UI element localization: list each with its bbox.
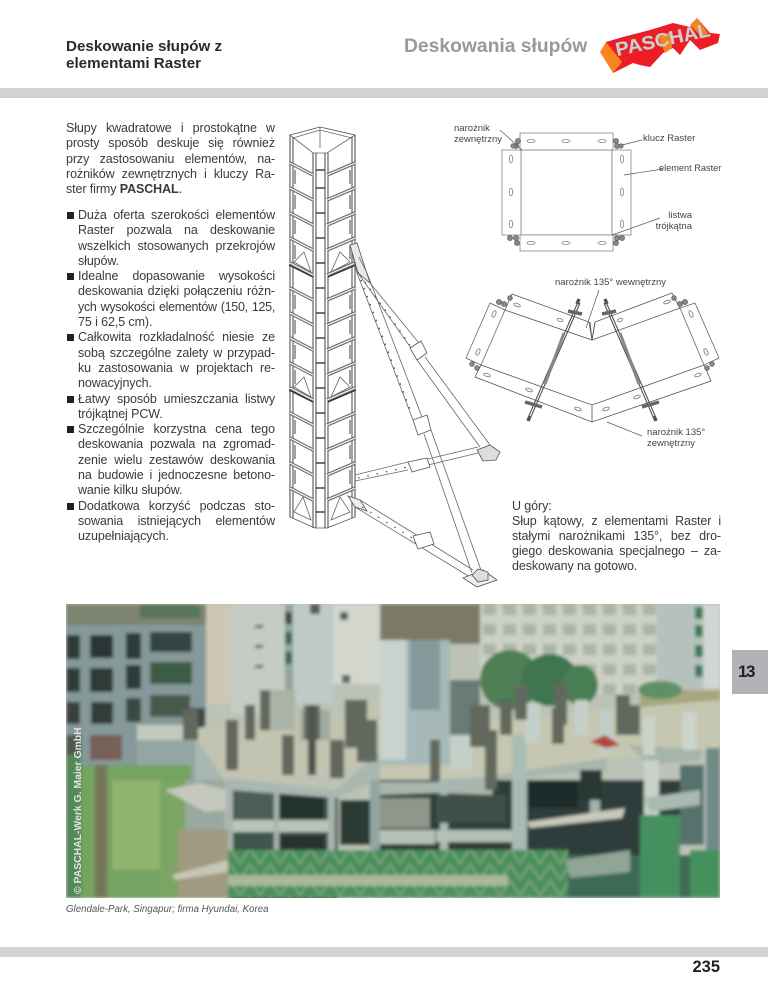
intro paragraph: Słupy kwadratowe i prostokątne w bbox=[66, 121, 275, 135]
bullet list: nowacyjnych. bbox=[78, 376, 152, 390]
chapter heading: Deskowania słupów bbox=[404, 36, 587, 57]
label: narożnik 135° zewnętrzny bbox=[647, 427, 705, 448]
upper brace bbox=[350, 243, 490, 447]
intro paragraph: prosty sposób deskuje się również bbox=[66, 136, 275, 150]
PASCHAL logo bbox=[600, 18, 720, 73]
intro paragraph: przy zastosowaniu elementów, na- bbox=[66, 152, 275, 166]
leader lines: square plan bbox=[500, 130, 663, 235]
caption: upper illustration bbox=[512, 499, 721, 573]
caption: upper illustration: giego deskowania specjalnego – za- bbox=[512, 544, 721, 558]
bullet list: Idealne dopasowanie wysokości bbox=[78, 269, 275, 283]
label: narożnik zewnętrzny: zewnętrzny bbox=[454, 134, 502, 144]
bullet list: zenie wielu zestawów deskowania bbox=[78, 453, 275, 467]
green netting left bbox=[66, 755, 191, 898]
chapter tab: 13 bbox=[738, 662, 754, 681]
photo: construction site bbox=[66, 604, 720, 898]
caption: upper illustration: U góry: bbox=[512, 499, 552, 513]
photo credit: © PASCHAL-Werk G. Maier GmbH bbox=[73, 727, 84, 894]
bullet list: ych wysokości elementów (150, 125, bbox=[78, 300, 275, 314]
label: narożnik 135° zewnętrzny: zewnętrzny bbox=[647, 438, 695, 448]
bullet list: uzupełniających. bbox=[78, 529, 169, 543]
intro paragraph: ster firmy PASCHAL. bbox=[66, 182, 182, 196]
label: klucz Raster: klucz Raster bbox=[643, 133, 695, 144]
top grey band bbox=[0, 88, 768, 98]
bullet list: wszelkich stosowanych przekrojów bbox=[78, 239, 275, 253]
label: element Raster: element Raster bbox=[659, 163, 721, 173]
central frame structure bbox=[165, 700, 680, 900]
right slab and columns bbox=[270, 640, 720, 860]
caption: upper illustration: deskowany na gotowo. bbox=[512, 559, 637, 573]
intro paragraph bbox=[66, 121, 275, 196]
intro paragraph: rożników zewnętrznych i kluczy Ra- bbox=[66, 167, 275, 181]
rebar cages bbox=[183, 685, 640, 790]
column body bbox=[289, 127, 356, 528]
label: narożnik zewnętrzny bbox=[454, 123, 502, 144]
PASCHAL logo: PASCHAL bbox=[614, 20, 712, 61]
stepped balcony bbox=[137, 708, 205, 780]
caption: upper illustration: stałymi narożnikami 135°, bez dro- bbox=[512, 529, 721, 543]
lower brace bbox=[348, 496, 473, 577]
section title: elementami Raster bbox=[66, 55, 201, 72]
bullet list: Łatwy sposób umieszczania listwy bbox=[78, 392, 275, 406]
illustration: 135° column plan bbox=[466, 293, 719, 422]
bullet list: Dodatkowa korzyść podczas sto- bbox=[78, 499, 275, 513]
bottom grey band bbox=[0, 947, 768, 957]
section title: Deskowanie słupów z bbox=[66, 38, 222, 55]
chapter tab bbox=[732, 650, 768, 694]
bullet list: sowania istniejących elementów bbox=[78, 514, 275, 528]
bullet list: Całkowita rozkładalność niesie ze bbox=[78, 330, 275, 344]
bullet list: 75 i 62,5 cm). bbox=[78, 315, 152, 329]
bullet list: ku zastosowania w projektach re- bbox=[78, 361, 275, 375]
photo caption: Glendale-Park, Singapur; firma Hyundai, Korea bbox=[66, 904, 268, 915]
trees bbox=[480, 650, 682, 710]
label: listwa trójkątna: listwa bbox=[668, 210, 692, 221]
bullet list: deskowania pozwala na zgromad- bbox=[78, 437, 275, 451]
page number: 235 bbox=[692, 958, 720, 976]
section title bbox=[66, 38, 222, 72]
bullet list: Duża oferta szerokości elementów bbox=[78, 208, 275, 222]
bullet list: sobą szczególne zalety w przypad- bbox=[78, 346, 275, 360]
label: narożnik 135° zewnętrzny: narożnik 135° bbox=[647, 427, 705, 438]
bullet list: Szczególnie korzystna cena tego bbox=[78, 422, 275, 436]
label: listwa trójkątna bbox=[656, 210, 692, 232]
green netting bottom bbox=[228, 815, 720, 898]
bullet list: wanie kilku słupów. bbox=[78, 483, 182, 497]
label: listwa trójkątna: trójkątna bbox=[656, 220, 692, 232]
bullet list: deskowania dzięki połączeniu różn- bbox=[78, 284, 275, 298]
bullet list: na budowie i jednoczesne betono- bbox=[78, 468, 275, 482]
label: narożnik 135° wewnętrzny: narożnik 135° wewnętrzny bbox=[555, 277, 666, 288]
horizontal brace bbox=[355, 445, 500, 481]
long diagonal brace bbox=[353, 257, 482, 573]
bullet list: słupów. bbox=[78, 254, 119, 268]
bullet list: Raster pozwala na deskowanie bbox=[78, 223, 275, 237]
bullet list bbox=[67, 208, 276, 543]
left concrete building bbox=[66, 604, 206, 765]
illustration: square column plan bbox=[502, 133, 631, 251]
label: narożnik zewnętrzny: narożnik bbox=[454, 123, 490, 134]
bullet list: trójkątnej PCW. bbox=[78, 407, 163, 421]
background towers bbox=[197, 604, 720, 730]
base plate bbox=[463, 569, 497, 587]
caption: upper illustration: Słup kątowy, z elementami Raster i bbox=[512, 514, 721, 528]
leader lines: 135° plan bbox=[586, 290, 642, 436]
